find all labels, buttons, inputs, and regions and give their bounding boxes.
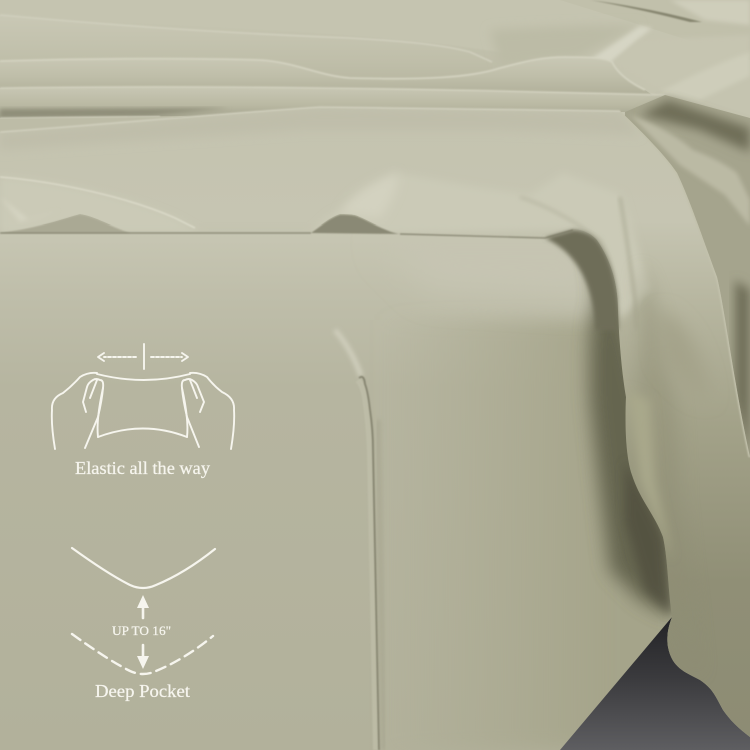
hem shadows on mattress bbox=[0, 215, 618, 330]
callout: elastic all the way bbox=[52, 344, 234, 478]
icon: pocket depth curves and arrows bbox=[72, 548, 215, 674]
icon: stretching hands and sheet bbox=[52, 344, 234, 449]
shadow under sheet on mattress side bbox=[572, 232, 672, 617]
floor bbox=[560, 617, 750, 750]
corner seam bbox=[335, 330, 384, 750]
callout: deep pocket bbox=[72, 548, 215, 701]
label: up to 16 inches: UP TO 16" bbox=[112, 623, 171, 638]
label: deep pocket: Deep Pocket bbox=[95, 681, 190, 701]
mattress front and side faces bbox=[0, 225, 750, 750]
outer sheet layer behind front panel bbox=[620, 95, 750, 737]
top right crescent shadow bbox=[590, 0, 750, 25]
sheet folds at top bbox=[0, 0, 750, 134]
label: elastic all the way: Elastic all the way bbox=[75, 458, 210, 478]
